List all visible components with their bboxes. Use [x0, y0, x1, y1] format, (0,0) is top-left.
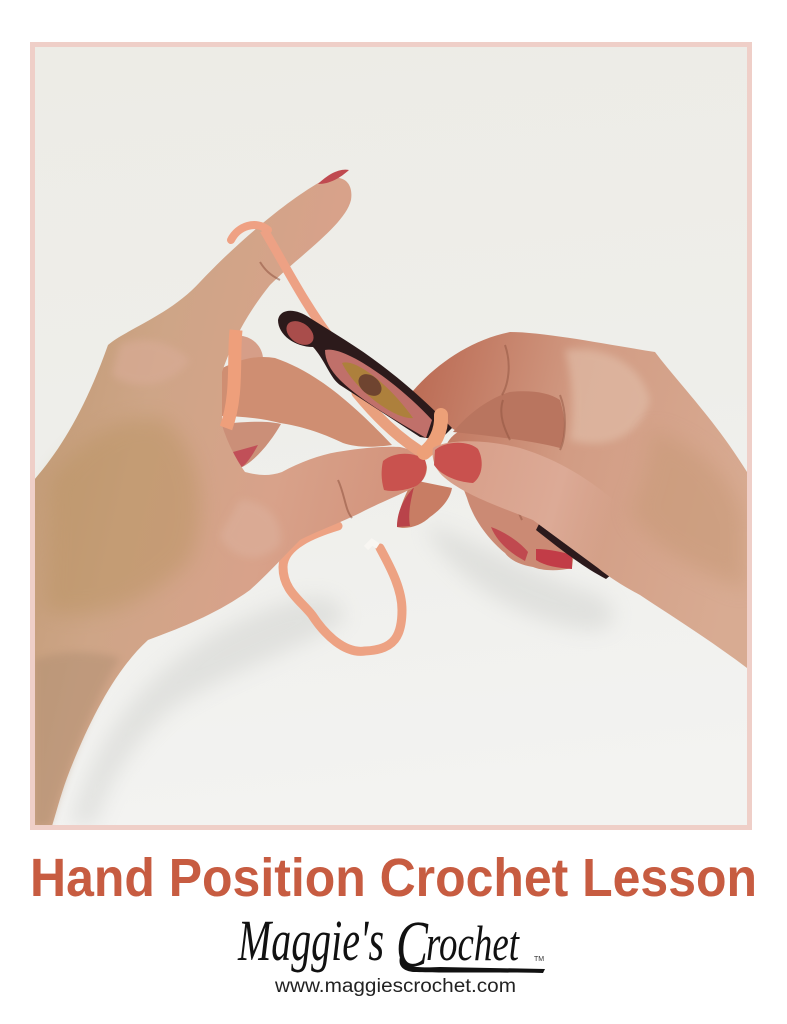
left hand: thumb nail — [382, 454, 426, 491]
hook: lower shaft — [536, 522, 612, 579]
right hand: small and ring fingers — [464, 490, 574, 570]
logo: hook underline — [400, 957, 545, 973]
shadows on table — [70, 525, 614, 825]
right hand: second finger shade — [453, 391, 564, 448]
photo frame — [32, 44, 750, 828]
right hand: thumb — [432, 441, 590, 561]
right hand: middle fingernail — [397, 487, 414, 527]
logo: trademark: TM — [534, 956, 544, 963]
right hand: curled middle finger — [397, 480, 452, 528]
yarn: loop around index finger — [231, 225, 268, 240]
right hand: nail small — [536, 549, 572, 569]
left hand: ring finger — [222, 422, 281, 468]
left hand: knuckle highlights — [114, 342, 182, 382]
right hand: thumb nail — [434, 443, 482, 483]
logo: Maggie's Crochet: Maggie's — [237, 908, 384, 973]
left hand: ring fingernail — [233, 445, 258, 468]
yarn: strand behind index finger — [226, 330, 236, 428]
left hand: index fingernail — [318, 170, 349, 184]
photo: hands crocheting — [34, 170, 747, 826]
logo: Maggie's Crochet: rochet — [426, 915, 520, 971]
right hand: highlights — [565, 349, 650, 444]
left hand: middle finger — [215, 357, 392, 447]
logo: Maggie's Crochet — [237, 908, 545, 997]
right hand: nail lower — [491, 527, 528, 561]
yarn: strand down from index finger — [264, 230, 332, 340]
left hand: mottled skin — [45, 418, 200, 614]
left hand: knuckle behind yarn — [241, 336, 263, 360]
yarn: hanging tail — [283, 526, 402, 651]
hook handle — [278, 311, 452, 440]
yarn: loop on hook — [424, 415, 441, 453]
yarn: working strand — [357, 393, 418, 450]
left hand: wrist shade — [34, 652, 120, 826]
yarn: cut end — [366, 542, 378, 548]
right hand: back and index — [412, 332, 747, 668]
logo: Maggie's Crochet: C — [396, 908, 429, 981]
right hand: knuckle creases — [501, 345, 565, 520]
left hand: palm, thumb and wrist — [34, 178, 427, 826]
logo: website: www.maggiescrochet.com — [274, 976, 516, 997]
